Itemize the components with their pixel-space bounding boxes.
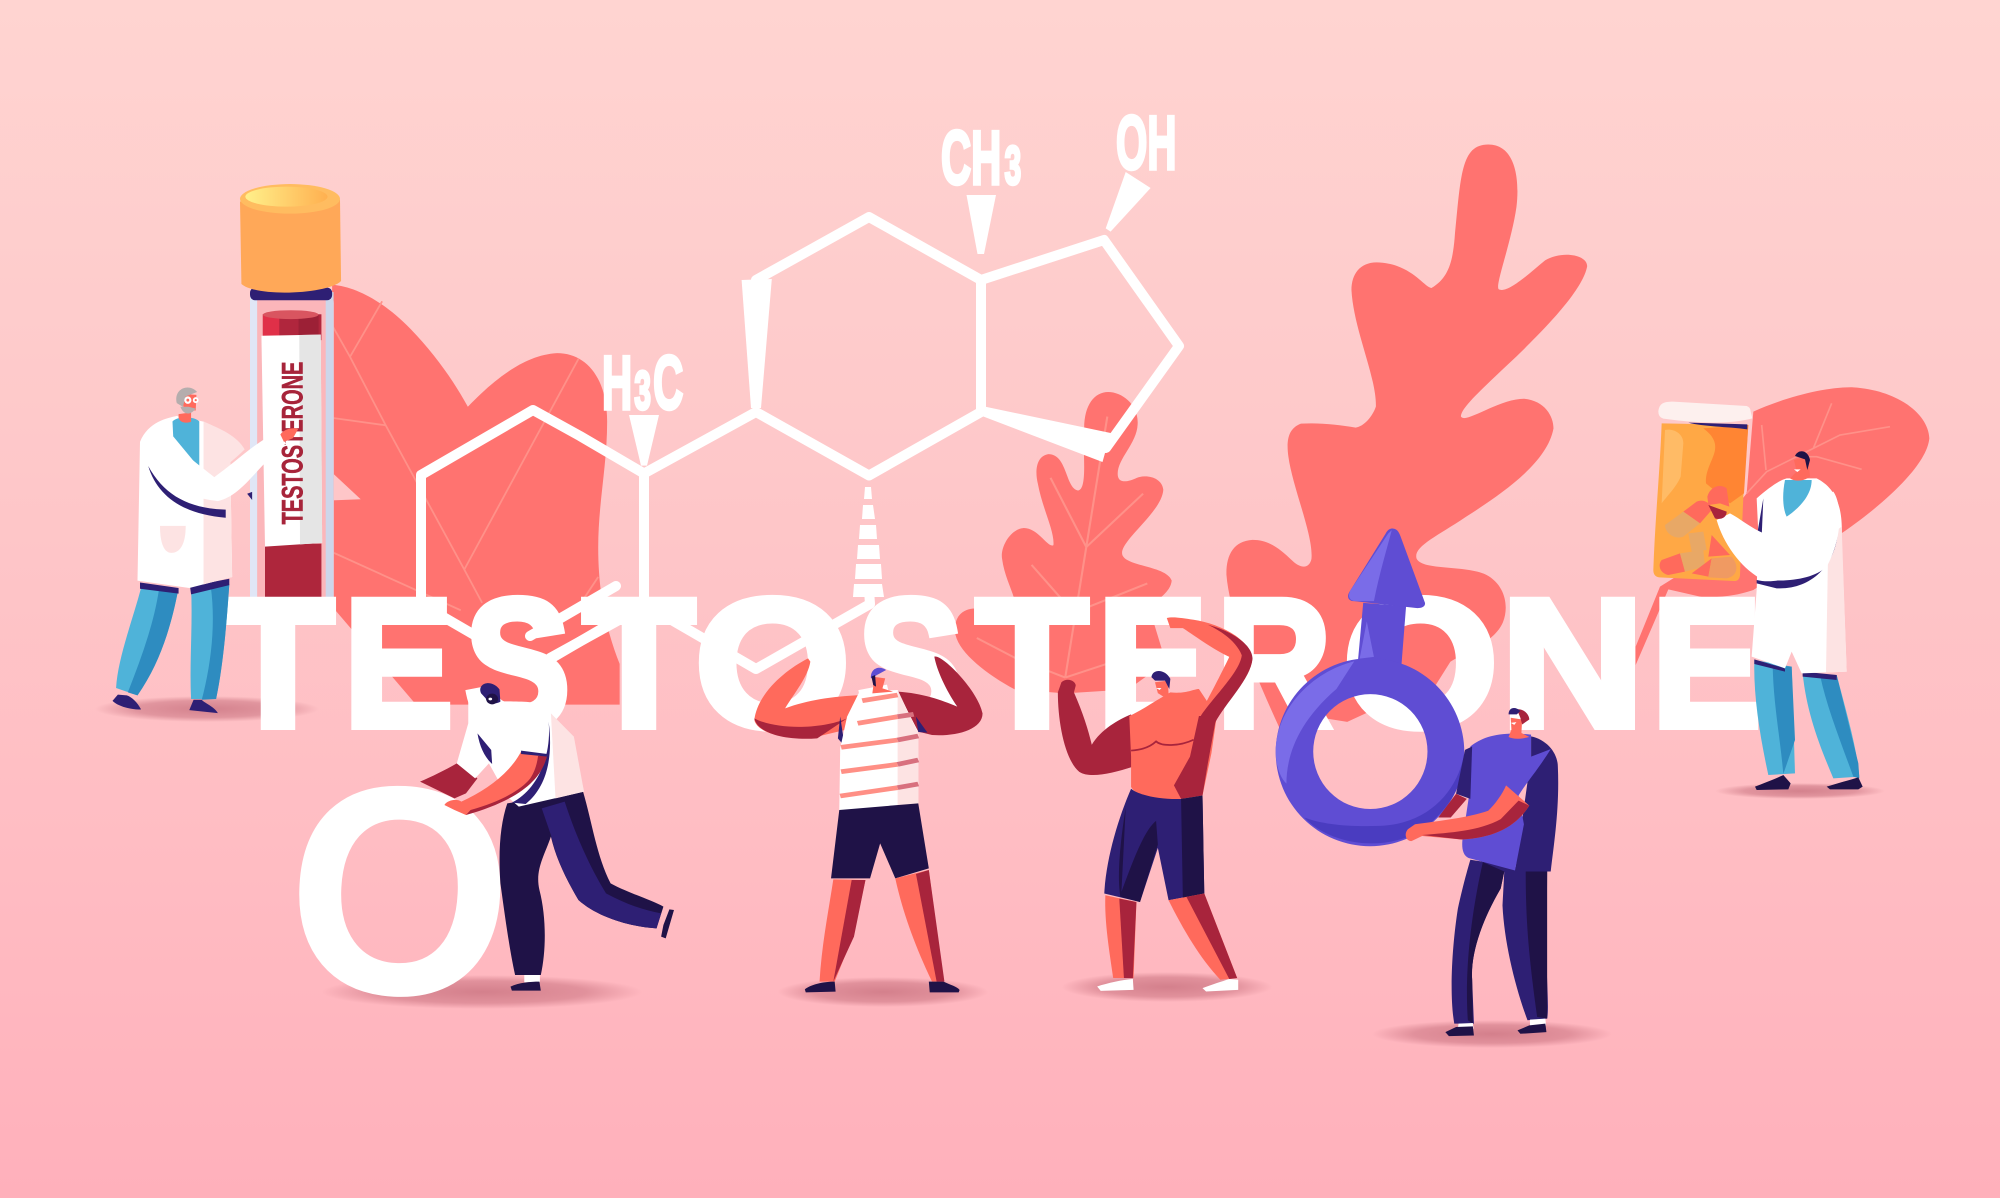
giant letter O with man's far arm: O — [279, 719, 521, 1064]
arm — [1717, 492, 1839, 588]
sample label — [261, 335, 322, 547]
sample label: TESTOSTERONE — [276, 362, 309, 524]
title: O — [1343, 561, 1498, 765]
head — [176, 387, 199, 423]
hand holding pill — [1707, 486, 1729, 519]
hand — [280, 428, 298, 442]
title: S — [858, 561, 963, 765]
title: E — [1652, 561, 1761, 765]
left arm — [1058, 680, 1133, 775]
shorts — [1104, 789, 1204, 902]
shoes — [511, 909, 674, 991]
arrow head — [1348, 528, 1425, 608]
muscular man posing — [1058, 617, 1252, 992]
sneakers — [1097, 979, 1238, 992]
head — [871, 668, 893, 693]
head — [480, 683, 500, 704]
title: T — [583, 561, 695, 765]
legs — [1105, 894, 1237, 980]
leaf: heart-shaped behind tube — [332, 285, 620, 705]
title: T — [222, 561, 334, 765]
title: N — [1501, 561, 1644, 765]
shorts — [831, 803, 929, 878]
ring — [1276, 658, 1464, 846]
shirt — [457, 695, 584, 807]
scientist with pill bottle — [1707, 451, 1863, 790]
tube cap — [240, 184, 341, 300]
bottle cap — [1658, 402, 1752, 429]
man with striped shirt flexing — [754, 656, 983, 992]
title: T — [976, 561, 1088, 765]
title: E — [344, 561, 453, 765]
shirt — [1456, 734, 1558, 872]
title: R — [1217, 561, 1331, 765]
head — [1509, 708, 1529, 739]
leaf: medium oak — [955, 392, 1172, 693]
man pushing letter O — [444, 683, 674, 991]
pill bottle — [1653, 402, 1752, 581]
molecule: testosterone structural formula — [421, 115, 1179, 669]
ring shadow — [1304, 753, 1464, 843]
torso — [1129, 689, 1217, 801]
bottle body — [1653, 423, 1748, 581]
raised arms — [754, 656, 983, 747]
raised arm — [1167, 617, 1252, 723]
formula label OH: OH — [1116, 100, 1176, 185]
head — [1151, 671, 1170, 696]
shoes — [1755, 775, 1863, 790]
test tube with blood sample — [240, 184, 341, 625]
leaf: upper-right behind bottle — [1636, 387, 1929, 665]
title: S — [465, 561, 570, 765]
leaf: large oak — [1226, 145, 1587, 729]
capsules — [1660, 501, 1736, 578]
arrow shaft — [1358, 603, 1406, 665]
bottle reflections — [1703, 425, 1748, 503]
formula label CH3: CH3 — [941, 115, 1021, 200]
head — [1790, 451, 1810, 481]
arms — [1406, 785, 1529, 841]
shoes — [805, 982, 960, 992]
formula label H3C: H3C — [602, 340, 683, 425]
trousers — [500, 792, 663, 975]
striped shirt — [839, 690, 918, 811]
trousers — [116, 579, 229, 700]
male gender symbol — [1276, 528, 1464, 846]
scientist with test tube — [112, 387, 298, 713]
blood — [263, 310, 321, 607]
title: E — [1098, 561, 1207, 765]
trousers — [1452, 860, 1548, 1024]
glass tube — [250, 292, 334, 625]
arrow highlights — [1349, 530, 1392, 659]
ground shadows — [95, 696, 1885, 1048]
legs — [820, 870, 944, 982]
shoes — [1445, 1019, 1546, 1036]
man holding male symbol — [1406, 708, 1558, 1036]
lab coat — [137, 416, 286, 588]
title: O — [695, 561, 850, 765]
ring highlight — [1276, 661, 1354, 784]
shoes — [112, 695, 218, 713]
arm — [444, 751, 547, 815]
lab coat — [1752, 478, 1847, 673]
trousers — [1754, 659, 1859, 778]
